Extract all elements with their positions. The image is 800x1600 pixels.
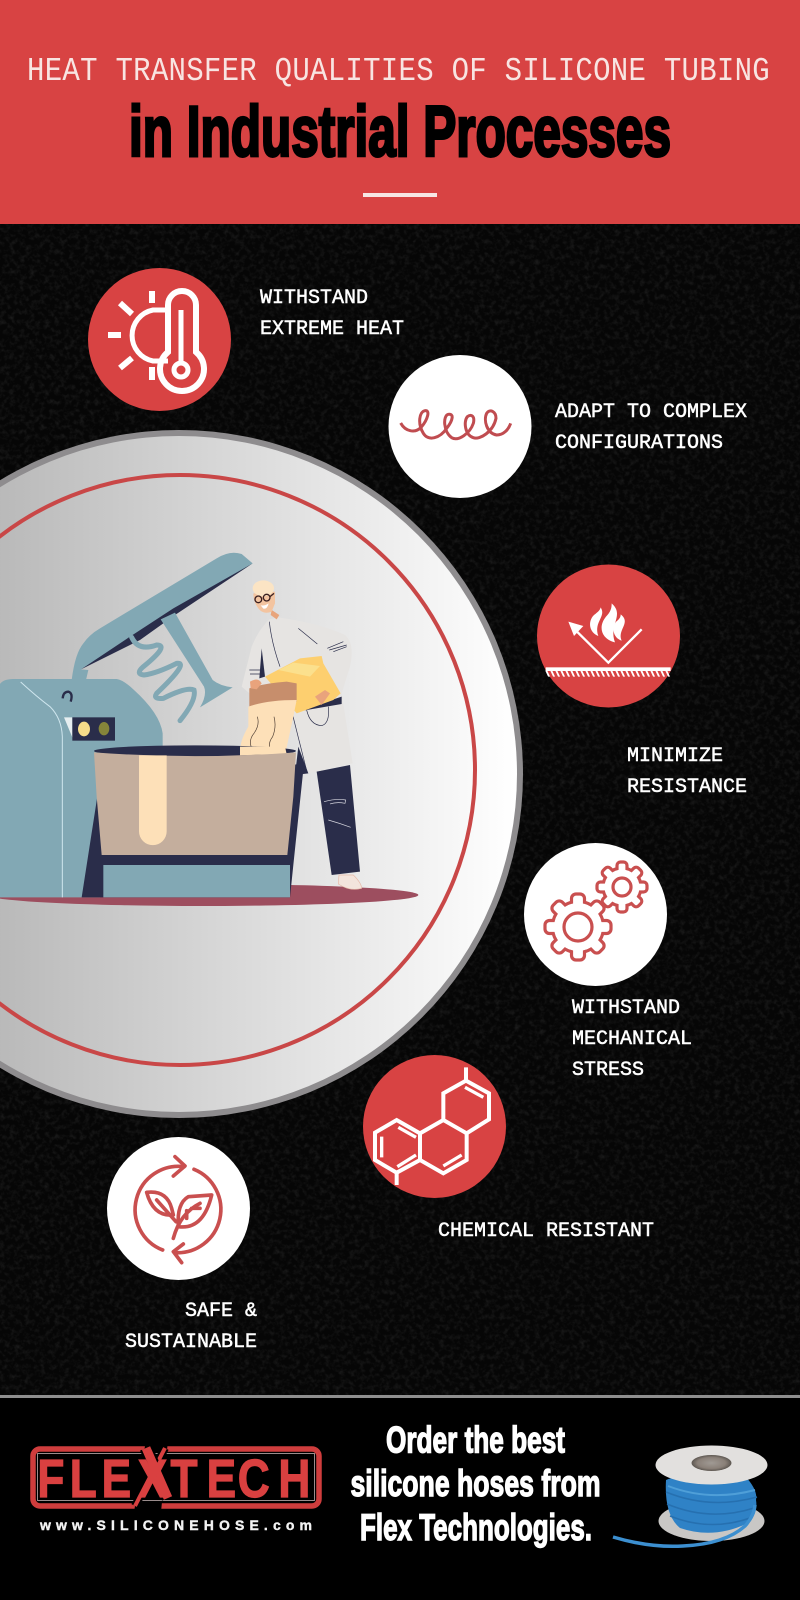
bowl xyxy=(94,745,296,855)
icon: thermometer and sun xyxy=(88,268,231,411)
item: chemical resistant xyxy=(363,1055,654,1243)
call to action: Flex Technologies. xyxy=(360,1507,592,1548)
body highlight xyxy=(21,682,62,897)
coat details xyxy=(249,622,347,773)
label: EXTREME HEAT xyxy=(260,318,404,341)
title line 1: HEAT TRANSFER QUALITIES OF SILICONE TUBING xyxy=(27,53,770,91)
label: SAFE & xyxy=(185,1300,257,1323)
header band xyxy=(0,0,800,224)
dough hook xyxy=(132,637,194,721)
title underline xyxy=(363,193,437,197)
label: ADAPT TO COMPLEX xyxy=(555,401,747,424)
shoe xyxy=(338,875,362,889)
icon: leaves in recycling loop xyxy=(107,1137,250,1280)
item: withstand mechanical stress xyxy=(524,843,692,1082)
control panel xyxy=(64,717,115,741)
mixer body xyxy=(0,679,163,897)
coat xyxy=(242,617,353,773)
mixer legs xyxy=(82,763,304,897)
icon: silicone tube reel xyxy=(613,1446,768,1546)
label: WITHSTAND xyxy=(260,287,368,310)
small gear xyxy=(597,862,647,912)
item: minimize resistance xyxy=(537,564,747,799)
label: MINIMIZE xyxy=(627,745,723,768)
item: safe and sustainable xyxy=(107,1137,257,1354)
logo: FlexTech xyxy=(33,1440,319,1533)
item: withstand extreme heat xyxy=(88,268,404,411)
mixer and baker illustration xyxy=(0,553,418,906)
icon: molecule xyxy=(363,1055,506,1198)
coat lower shadow xyxy=(295,747,308,775)
call to action: silicone hoses from xyxy=(350,1463,600,1504)
trouser creases xyxy=(324,799,351,827)
label: SUSTAINABLE xyxy=(125,1331,257,1354)
textured black background xyxy=(0,224,800,1396)
icon: coil xyxy=(388,355,532,498)
item: adapt to complex configurations xyxy=(388,355,747,498)
label: WITHSTAND xyxy=(572,997,680,1020)
label: CONFIGURATIONS xyxy=(555,432,723,455)
icon: gears xyxy=(524,843,667,986)
label: STRESS xyxy=(572,1059,644,1082)
beater bar xyxy=(161,613,233,707)
head xyxy=(253,580,279,619)
footer band xyxy=(0,1395,800,1600)
apron belt xyxy=(297,697,342,712)
arm underside xyxy=(81,563,253,669)
floor shadow xyxy=(0,884,418,906)
label: MECHANICAL xyxy=(572,1028,692,1051)
call to action: Order the best xyxy=(386,1420,565,1460)
flour sack xyxy=(240,656,341,757)
baker legs xyxy=(317,765,360,875)
illustration disc with mixer and baker xyxy=(0,430,523,1118)
label: RESISTANCE xyxy=(627,776,747,799)
mixer base xyxy=(103,865,290,897)
control mark xyxy=(63,692,72,702)
logo url: www.SILICONEHOSE.com xyxy=(39,1517,312,1533)
label: CHEMICAL RESISTANT xyxy=(438,1220,654,1243)
large gear xyxy=(545,894,611,960)
logo wordmark: FLEXTECH xyxy=(37,1449,310,1509)
icon: heat reflecting off surface xyxy=(537,564,680,708)
call to action xyxy=(350,1420,600,1548)
coat inner shadow xyxy=(259,648,265,678)
red inner ring xyxy=(0,475,475,1065)
mixer arm xyxy=(72,553,253,680)
